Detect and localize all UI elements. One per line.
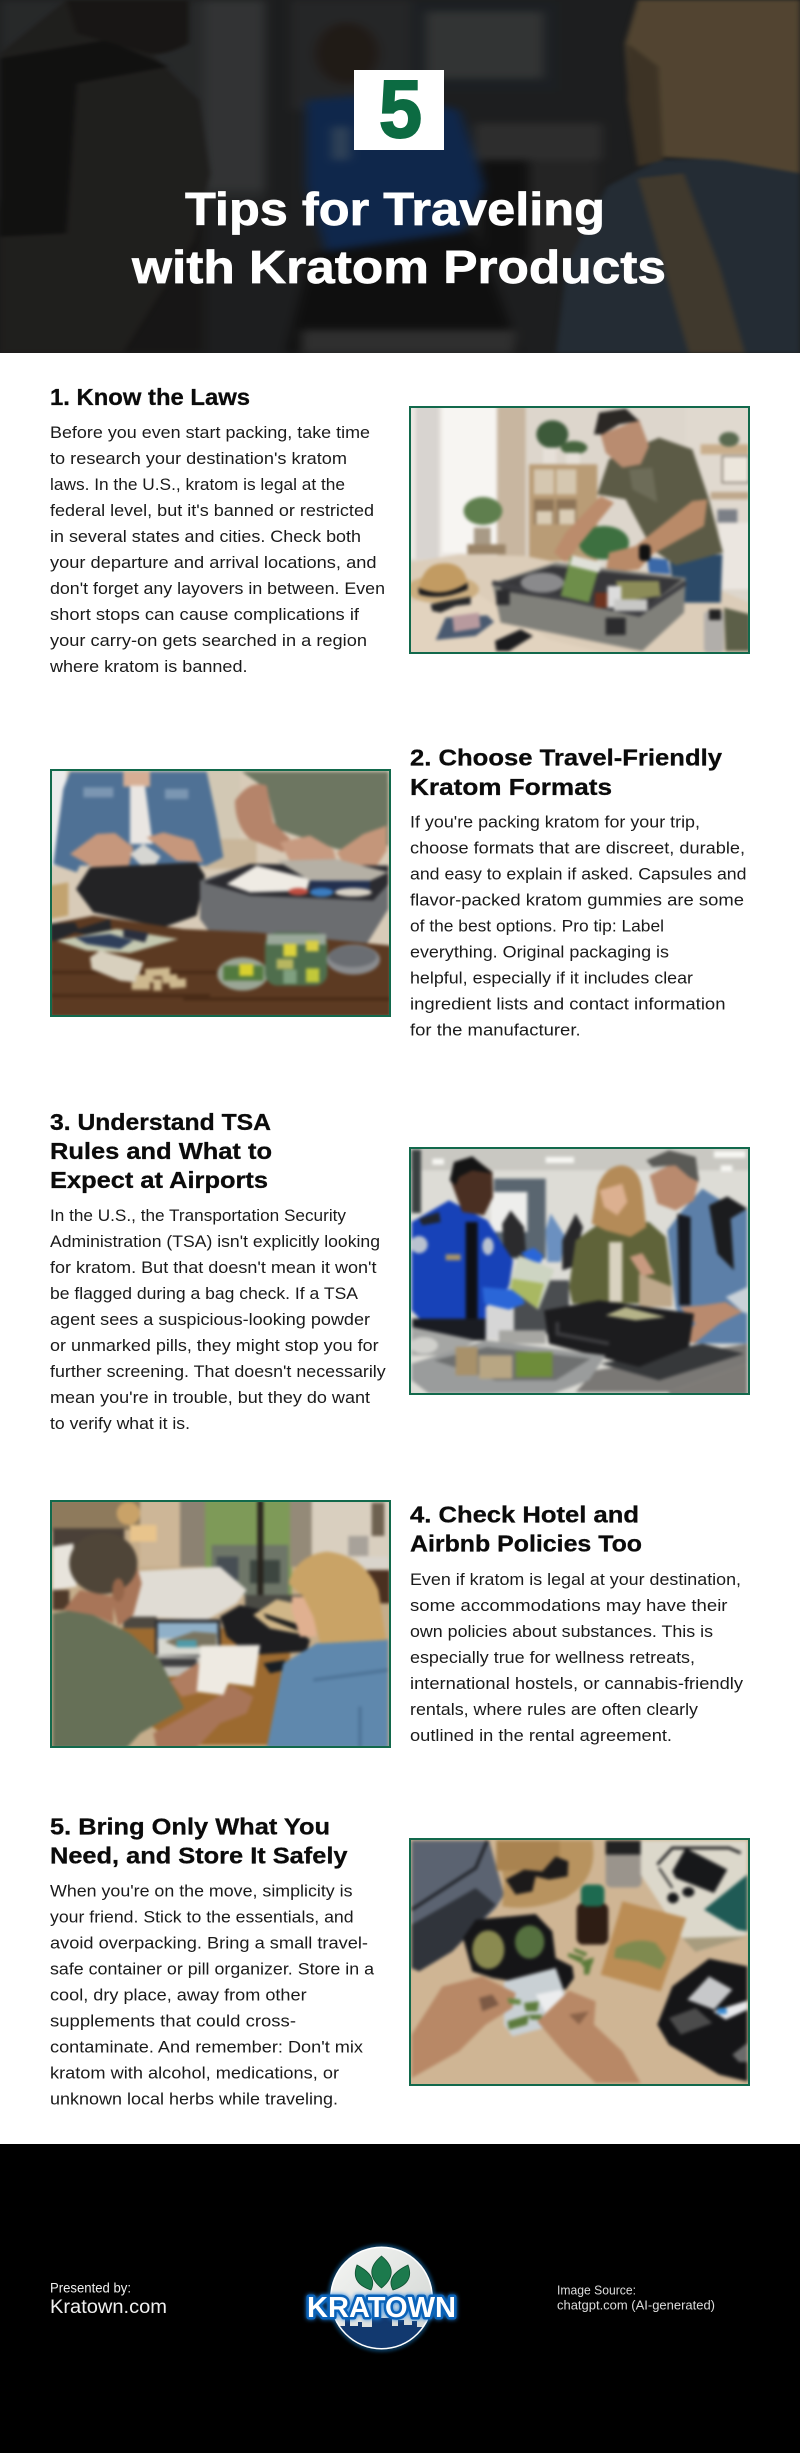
body text: tip 2 [410, 814, 746, 1040]
body text: tip 3: In the U.S., the Transportation Security [50, 1207, 347, 1225]
body text: tip 2: of the best options. Pro tip: Label [410, 918, 664, 936]
heading: tip 2 [410, 745, 722, 800]
black suitcase [544, 1300, 694, 1367]
hero background photo [0, 0, 800, 353]
logo wordmark: KRATOWN [307, 2292, 456, 2324]
presented by: Kratown.com [50, 2297, 167, 2318]
black organizer case [463, 1914, 574, 1990]
body text: tip 4 [410, 1571, 744, 1745]
man [554, 409, 723, 603]
body text: tip 1: in several states and cities. Check both [50, 528, 361, 546]
body text: tip 5: kratom with alcohol, medications, or [50, 2065, 340, 2083]
photo: flat lay of travel items and pill organizer [409, 1838, 750, 2086]
title: Tips for Traveling [185, 183, 605, 235]
body text: tip 2: everything. Original packaging is [410, 944, 669, 962]
body text: tip 5 [50, 1883, 375, 2109]
body text: tip 5: supplements that could cross- [50, 2013, 296, 2031]
suitcase [492, 555, 686, 651]
heading: tip 3: Expect at Airports [50, 1167, 268, 1193]
panel: tip 4 [43, 1493, 744, 1757]
body text: tip 1: where kratom is banned. [49, 658, 248, 676]
body text: tip 2: If you're packing kratom for your trip, [410, 814, 700, 832]
hat [406, 563, 479, 603]
heading: tip 3: 3. Understand TSA [50, 1109, 271, 1135]
photo: man packing a suitcase [409, 406, 750, 654]
body text: tip 3 [50, 1207, 387, 1433]
image source: chatgpt.com (AI-generated) [557, 2298, 715, 2312]
shelf unit [529, 464, 597, 561]
rental agreement [197, 1645, 260, 1695]
body text: tip 4: some accommodations may have their [410, 1597, 728, 1615]
body text: tip 1: laws. In the U.S., kratom is legal at the [50, 476, 345, 494]
body text: tip 1: your carry-on gets searched in a region [50, 632, 367, 650]
backpack [412, 1841, 504, 1971]
body text: tip 5: avoid overpacking. Bring a small travel- [50, 1935, 368, 1953]
panel: tip 5 [50, 1813, 759, 2109]
heading: tip 4: Airbnb Policies Too [410, 1531, 642, 1557]
hero banner [0, 0, 800, 367]
logo skyline [340, 2318, 422, 2348]
body text: tip 4: outlined in the rental agreement. [410, 1727, 672, 1745]
woman [569, 1165, 672, 1307]
woman from behind [267, 1552, 388, 1748]
straw hat [496, 1841, 593, 1908]
number badge: 5 [379, 64, 422, 155]
photo: couple reading rental agreement [50, 1500, 391, 1748]
body text: tip 3: Administration (TSA) isn't explicitly looking [50, 1233, 380, 1251]
body text: tip 1 [49, 424, 385, 676]
capsules [90, 951, 186, 991]
bag and hat [220, 1599, 310, 1655]
heading: tip 2: 2. Choose Travel-Friendly [410, 745, 722, 771]
capsules [568, 1948, 594, 1975]
laptop [155, 1619, 221, 1677]
balcony window [205, 1500, 292, 1595]
panel: tip 2 [43, 745, 747, 1040]
black medical pouch [657, 1959, 747, 2081]
body text: tip 1: federal level, but it's banned or restricted [50, 502, 374, 520]
body text: tip 2: flavor-packed kratom gummies are some [410, 892, 744, 910]
body text: tip 4: rentals, where rules are often clearly [410, 1701, 699, 1719]
metal detector frame [491, 1179, 546, 1259]
body text: tip 1: don't forget any layovers in between. Even [50, 580, 385, 598]
heading: tip 4: 4. Check Hotel and [410, 1502, 639, 1528]
woman in denim jacket [53, 772, 223, 872]
body text: tip 4: own policies about substances. This is [410, 1623, 713, 1641]
heading: tip 3: Rules and What to [50, 1138, 272, 1164]
body text: tip 1: your departure and arrival locations, and [50, 554, 376, 572]
panel: tip 3 [50, 1109, 759, 1433]
body text: tip 2: choose formats that are discreet, durable, [410, 840, 745, 858]
black toiletry bag [76, 862, 205, 927]
body text: tip 5: contaminate. And remember: Don't mix [50, 2039, 364, 2057]
body text: tip 4: international hostels, or cannabis-friendly [410, 1675, 744, 1693]
title: with Kratom Products [131, 241, 666, 293]
body text: tip 4: especially true for wellness retreats, [410, 1649, 695, 1667]
bed [53, 1543, 247, 1620]
hands [412, 1976, 641, 2083]
photo: couple packing capsules and gummies [50, 769, 391, 1017]
camera [657, 1848, 741, 1903]
heading: tip 5 [50, 1813, 348, 1868]
body text: tip 3: further screening. That doesn't necessarily [50, 1363, 387, 1381]
body text: tip 1: Before you even start packing, take time [50, 424, 370, 442]
map and notebook [641, 1841, 747, 1952]
man in denim shirt [646, 1150, 747, 1344]
amber bottle [577, 1885, 608, 1945]
photo: TSA agent checking a bag [409, 1147, 750, 1395]
kraft pouch [601, 1901, 686, 1991]
body text: tip 1: short stops can cause complications if [50, 606, 359, 624]
heading: tip 5: Need, and Store It Safely [50, 1842, 348, 1868]
body text: tip 3: for kratom. But that doesn't mean it won't [50, 1259, 377, 1277]
body text: tip 2: and easy to explain if asked. Capsules and [410, 866, 746, 884]
woman silhouette [556, 0, 800, 353]
number badge [354, 64, 444, 155]
body text: tip 1: to research your destination's kratom [50, 450, 347, 468]
body text: tip 3: be flagged during a bag check. If a TSA [50, 1285, 358, 1303]
footer [0, 2144, 800, 2453]
heading: tip 2: Kratom Formats [410, 774, 612, 800]
wooden table [50, 916, 391, 1017]
grey travel bag [200, 859, 388, 944]
heading: tip 5: 5. Bring Only What You [50, 1813, 330, 1839]
table [117, 1628, 290, 1745]
screening bins [410, 1327, 606, 1394]
body text: tip 3: mean you're in trouble, but they do want [50, 1389, 370, 1407]
body text: tip 5: unknown local herbs while traveling. [50, 2091, 338, 2109]
image source [557, 2284, 715, 2312]
image source: Image Source: [557, 2284, 636, 2298]
body text: tip 5: When you're on the move, simplicity is [50, 1883, 352, 1901]
panel: tip 1 [49, 384, 759, 676]
body text: tip 2: helpful, especially if it includes clear [410, 970, 694, 988]
body text: tip 4: Even if kratom is legal at your destination, [410, 1571, 741, 1589]
body text: tip 5: cool, dry place, away from other [50, 1987, 307, 2005]
TSA officer [410, 1156, 543, 1340]
heading: tip 3 [50, 1109, 272, 1193]
steel bottle [606, 1841, 642, 1887]
body text: tip 5: safe container or pill organizer. Store in a [50, 1961, 375, 1979]
gummy jars [217, 932, 380, 991]
man from behind [53, 1533, 253, 1748]
pill organizer [504, 1968, 572, 2036]
man silhouette [0, 0, 210, 353]
man in green shirt [235, 772, 388, 876]
evidence bag [508, 1255, 554, 1310]
body text: tip 2: for the manufacturer. [410, 1022, 581, 1040]
logo: Kratown [307, 2244, 456, 2352]
presented by [50, 2281, 167, 2318]
presented by: Presented by: [50, 2281, 131, 2296]
title [131, 183, 666, 293]
heading: tip 1: 1. Know the Laws [50, 384, 250, 410]
body text: tip 5: your friend. Stick to the essentials, and [50, 1909, 354, 1927]
body text: tip 3: or unmarked pills, they might stop you for [50, 1337, 379, 1355]
body text: tip 3: to verify what it is. [50, 1415, 190, 1433]
logo leaves [355, 2256, 410, 2290]
conveyor [499, 1330, 747, 1395]
body text: tip 3: agent sees a suspicious-looking powder [50, 1311, 371, 1329]
heading: tip 4 [410, 1502, 642, 1557]
body text: tip 2: ingredient lists and contact information [410, 996, 726, 1014]
